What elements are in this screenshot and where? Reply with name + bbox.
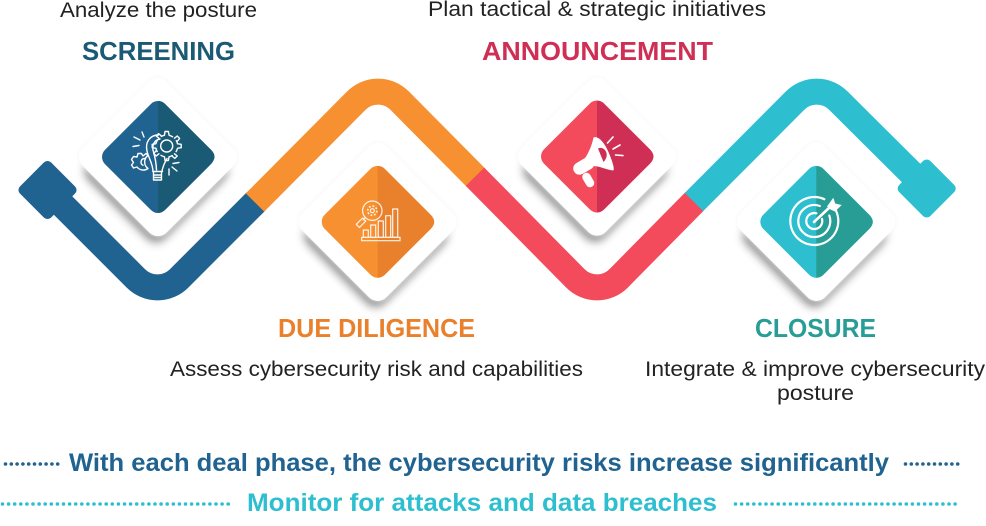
ribbon segment: announcement pink [475,177,695,287]
ribbon: winding process path [48,92,927,287]
text: closure description: Integrate & improve cybersecurity [645,358,986,381]
icon: magnifier over bar chart [356,201,400,241]
ribbon segment: closure teal [694,92,927,202]
callout: cybersecurity risks increase: With each deal phase, the cybersecurity risks increase significantly [69,449,889,477]
text: closure description: posture [777,382,854,405]
text: closure description [645,358,986,405]
ribbon segment: due diligence orange [255,92,476,202]
ribbon end cap: right [896,157,958,220]
icon: megaphone [580,137,623,183]
ribbon segment: screening blue [48,190,256,287]
panel: announcement diamond [513,72,681,247]
callout: monitor for attacks: Monitor for attacks and data breaches [247,489,717,517]
panel: screening diamond [74,73,242,247]
ribbon end cap: left [16,159,79,221]
heading: announcement: ANNOUNCEMENT [482,36,713,66]
icon: light bulb with gears [132,132,181,180]
heading: screening: SCREENING [82,36,235,66]
text: due diligence description: Assess cybersecurity risk and capabilities [170,358,583,381]
icon: target with arrow [790,197,842,245]
heading: due diligence: DUE DILIGENCE [278,313,475,343]
panel: due diligence diamond [294,138,462,312]
heading: closure: CLOSURE [755,313,876,343]
panel: closure diamond [732,138,900,312]
